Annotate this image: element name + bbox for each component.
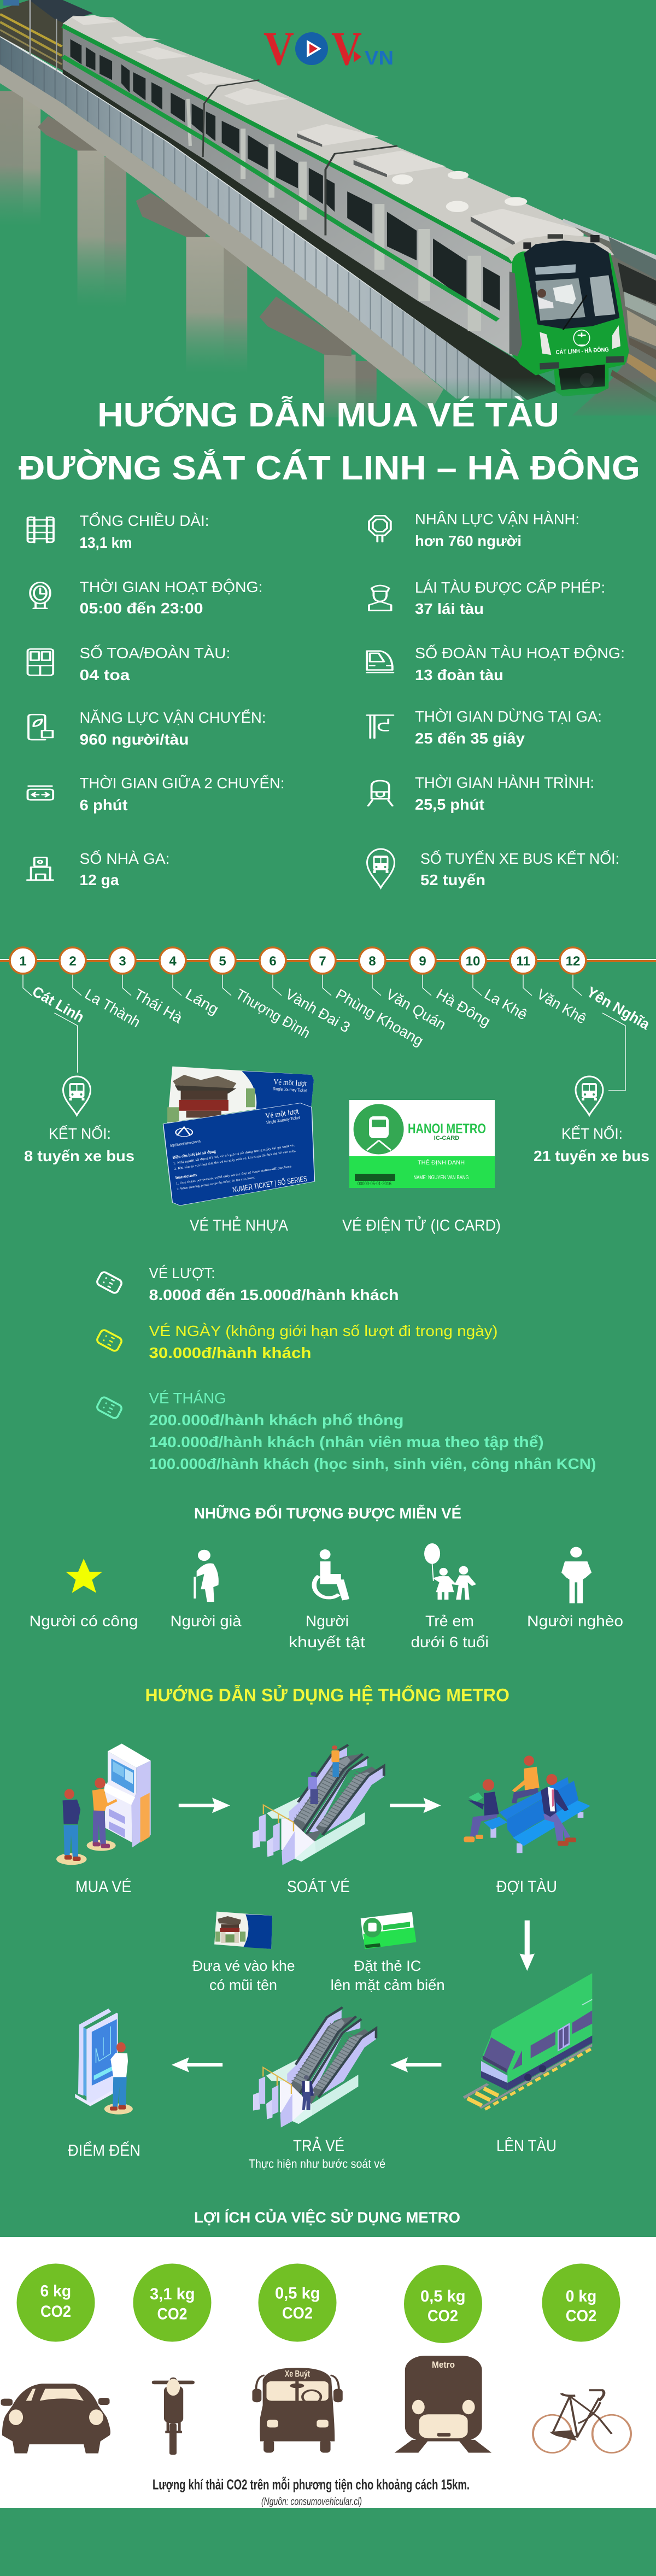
stat: total length: [80, 512, 209, 551]
fare: day pass: 30.000đ/hành khách: [149, 1344, 312, 1361]
CO2 badge: car: 6 kg: [40, 2282, 71, 2300]
ticket labels: VÉ ĐIỆN TỬ (IC CARD): [342, 1216, 501, 1234]
plastic ticket cards: 1. One ticket per person, valid only on the day of issue station-off purchase.: [175, 1164, 292, 1186]
gate instruction text: Đưa vé vào khe: [192, 1958, 295, 1974]
icon: station: [27, 857, 53, 880]
label: bus: Xe Buýt: [285, 2368, 310, 2379]
fare: single journey: VÉ LƯỢT:: [149, 1264, 215, 1281]
panel: key facts: [27, 511, 625, 888]
line map: 12 stations: Phùng Khoang: [333, 986, 426, 1049]
icon: stop sign: [369, 516, 391, 542]
arrow: to ticket gate: [179, 1798, 230, 1813]
icon: track: [28, 517, 54, 542]
stat: staff: hơn 760 người: [415, 532, 522, 549]
callout: Cát Linh connections: 8 tuyến xe bus: [24, 1148, 134, 1164]
icon: children with balloon: [424, 1543, 476, 1600]
icon: man: [561, 1547, 591, 1603]
stat: staff: [415, 511, 579, 549]
stat: stations: SỐ NHÀ GA:: [80, 850, 169, 867]
step labels: row 2: Thực hiện như bước soát vé: [249, 2157, 385, 2170]
IC card: 00000-05-01-2016: [358, 1181, 391, 1186]
icon: Cát Linh bus pin: [63, 1076, 91, 1115]
stat: stations: 12 ga: [80, 871, 119, 888]
heading: exempt groups: NHỮNG ĐỐI TƯỢNG ĐƯỢC MIỄN VÉ: [194, 1504, 461, 1522]
plastic ticket cards: 1. Mỗi người sử dụng 01 vé, vé có giá trị sử dụng trong ngày tại ga xuất vé.: [173, 1143, 295, 1166]
icon: phone ticket: [28, 715, 52, 740]
label: elderly: Người già: [171, 1613, 242, 1629]
stat: dwell time: 25 đến 35 giây: [415, 730, 525, 747]
CO2 badge: bus: CO2: [282, 2304, 313, 2322]
line map: 12 stations: Vành Đai 3: [283, 986, 353, 1036]
label: the poor: Người nghèo: [527, 1613, 623, 1629]
label: disabled: Người: [306, 1613, 349, 1629]
title: ĐƯỜNG SẮT CÁT LINH – HÀ ĐÔNG: [19, 449, 640, 487]
icon: bus pin: [367, 849, 395, 888]
stat: licensed drivers: [415, 579, 605, 617]
icon: ticket mint: [96, 1396, 123, 1419]
callout: Yên Nghĩa connections: 21 tuyến xe bus: [534, 1148, 649, 1164]
line map: 12 stations: 7: [319, 954, 326, 969]
panel: CO2 emissions: [0, 2237, 656, 2508]
stat: connected bus routes: [420, 850, 619, 888]
step labels: row 2: [68, 2136, 557, 2170]
label: metro: Metro: [432, 2360, 455, 2370]
step labels: row 2: LÊN TÀU: [496, 2137, 557, 2155]
CO2 badge: bicycle: [542, 2263, 620, 2342]
fare: single journey: 8.000đ đến 15.000đ/hành khách: [149, 1286, 399, 1303]
logo: VOV.VN: VN: [365, 46, 394, 69]
fare: monthly pass: 200.000đ/hành khách phổ thông: [149, 1412, 403, 1428]
CO2 badge: bus: [258, 2263, 337, 2342]
stat: cars per train: [80, 644, 231, 683]
arrow: down to boarding: [520, 1921, 535, 1971]
hero photo: elevated metro train on viaduct: [0, 0, 656, 424]
stat: capacity: 960 người/tàu: [80, 731, 189, 748]
gate instruction text: [192, 1958, 445, 1993]
line map: 12 stations: Cát Linh: [30, 983, 87, 1026]
stat: dwell time: THỜI GIAN DỪNG TẠI GA:: [415, 708, 602, 725]
line map: 12 stations: Văn Quán: [383, 986, 449, 1033]
icon: train front: [368, 781, 393, 806]
label: meritorious people: Người có công: [30, 1613, 138, 1629]
plastic ticket cards: Điều cần biết khi sử dụng: [172, 1149, 216, 1160]
CO2 badge: car: [16, 2263, 95, 2342]
stat: stations: [80, 850, 169, 888]
hero photo: elevated metro train on viaduct: CÁT LINH - HÀ ĐÔNG: [555, 346, 609, 356]
stat: connected bus routes: 52 tuyến: [420, 871, 485, 888]
icon: ticket white: [96, 1271, 123, 1294]
stat: total length: TỔNG CHIỀU DÀI:: [80, 512, 209, 529]
line map: 12 stations: [0, 947, 656, 1091]
icon: bus: [252, 2368, 343, 2453]
step labels: row 1: ĐỢI TÀU: [496, 1878, 557, 1896]
fare: single journey: [149, 1264, 399, 1303]
line map: 12 stations: La Khê: [482, 986, 530, 1023]
step: boarding train illustration: [463, 1973, 592, 2109]
icon: carriage: [28, 649, 53, 675]
icon: star: [66, 1559, 102, 1593]
stat: licensed drivers: LÁI TÀU ĐƯỢC CẤP PHÉP:: [415, 579, 605, 596]
stat: connected bus routes: SỐ TUYẾN XE BUS KẾT NỐI:: [420, 850, 619, 867]
CO2 badge: motorbike: [133, 2263, 211, 2342]
icon: clock: [30, 582, 50, 608]
CO2 badge: motorbike: 3,1 kg: [150, 2285, 195, 2303]
fare: monthly pass: VÉ THÁNG: [149, 1390, 226, 1407]
icon: bicycle: [533, 2390, 631, 2453]
step: return ticket illustration: [253, 2007, 376, 2128]
label: disabled: khuyết tật: [289, 1634, 365, 1650]
logo: VOV.VN: V: [331, 22, 362, 75]
icon: train side: [367, 651, 393, 672]
arrow: to return ticket: [390, 2057, 441, 2072]
plastic ticket cards: http://hanoimetro.com.vn: [170, 1140, 201, 1148]
plastic ticket cards: [163, 1067, 315, 1205]
icon: elderly person: [194, 1550, 219, 1602]
line map: 12 stations: 10: [466, 954, 480, 969]
stat: headway: [80, 775, 284, 813]
icon: driver: [369, 586, 391, 611]
stat: journey time: THỜI GIAN HÀNH TRÌNH:: [415, 774, 594, 791]
line map: 12 stations: 9: [419, 954, 426, 969]
stat: capacity: NĂNG LỰC VẬN CHUYỂN:: [80, 709, 266, 726]
icon: car: [1, 2384, 110, 2454]
gate instruction text: có mũi tên: [209, 1977, 277, 1993]
plastic ticket cards: Single Journey Ticket: [273, 1086, 307, 1093]
plastic ticket cards: Instructions: [175, 1172, 197, 1180]
step: destination map kiosk illustration: [75, 2009, 133, 2115]
IC card: [349, 1100, 495, 1188]
icon: Yên Nghĩa bus pin: [576, 1076, 603, 1115]
callout: Cát Linh connections: [24, 1125, 134, 1164]
line map: 12 stations: 3: [119, 954, 126, 969]
stat: cars per train: 04 toa: [80, 666, 130, 683]
callout: Yên Nghĩa connections: [534, 1125, 649, 1164]
step labels: row 1: [75, 1878, 557, 1896]
icon: metro: [395, 2356, 491, 2453]
plastic ticket cards: Single Journey Ticket: [266, 1115, 301, 1125]
line map: 12 stations: La Thành: [82, 986, 143, 1031]
line map: 12 stations: Láng: [183, 986, 221, 1018]
callout: Yên Nghĩa connections: KẾT NỐI:: [561, 1125, 623, 1142]
caption: Lượng khí thải CO2 trên mỗi phương tiện cho khoảng cách 15km.: [153, 2477, 470, 2493]
CO2 badge: car: CO2: [40, 2303, 71, 2321]
stat: operating hours: 05:00 đến 23:00: [80, 600, 203, 617]
icon: platform sign: [367, 715, 393, 738]
plastic ticket cards: Vé một lượt: [273, 1078, 307, 1088]
ticket labels: [190, 1216, 501, 1234]
stat: licensed drivers: 37 lái tàu: [415, 600, 484, 617]
step labels: row 1: SOÁT VÉ: [287, 1878, 350, 1896]
label: disabled: [289, 1613, 365, 1650]
icon: motorbike: [152, 2378, 195, 2455]
step labels: row 1: MUA VÉ: [75, 1878, 131, 1896]
plastic ticket cards: Vé một lượt: [265, 1108, 300, 1121]
line map: 12 stations: 2: [69, 954, 77, 969]
icon: interval board: [28, 786, 53, 800]
step: buy ticket illustration: [56, 1743, 151, 1865]
line map: 12 stations: Yên Nghĩa: [584, 983, 653, 1033]
label: children under six: Trẻ em: [425, 1613, 474, 1629]
line map: 12 stations: 12: [566, 954, 580, 969]
stat: trains in service: SỐ ĐOÀN TÀU HOẠT ĐỘNG:: [415, 644, 625, 661]
heading: benefits: LỢI ÍCH CỦA VIỆC SỬ DỤNG METRO: [194, 2209, 460, 2226]
plastic ticket cards: NUMER TICKET | SỐ SERIES: [232, 1174, 308, 1194]
gate instruction text: Đặt thẻ IC: [354, 1958, 421, 1974]
label: children under six: dưới 6 tuổi: [411, 1634, 489, 1650]
stat: staff: NHÂN LỰC VẬN HÀNH:: [415, 511, 579, 528]
fare: monthly pass: 140.000đ/hành khách (nhân viên mua theo tập thể): [149, 1433, 543, 1450]
CO2 badge: metro: 0,5 kg: [420, 2287, 466, 2305]
logo: VOV.VN: V: [263, 22, 294, 75]
fare: day pass: VÉ NGÀY (không giới hạn số lượt đi trong ngày): [149, 1322, 497, 1339]
step: ticket gate illustration: [253, 1745, 384, 1865]
step labels: row 2: ĐIỂM ĐẾN: [68, 2141, 140, 2159]
stat: cars per train: SỐ TOA/ĐOÀN TÀU:: [80, 644, 231, 661]
gate instruction text: lên mặt cảm biến: [331, 1977, 445, 1993]
plastic ticket cards: 2. Khi vào ga vui lòng đưa thẻ vé tại máy soát vé, khi ra ga thì đưa thẻ vé vào máy.: [174, 1149, 296, 1171]
callout: Cát Linh connections: KẾT NỐI:: [49, 1125, 111, 1142]
line map: 12 stations: 8: [368, 954, 376, 969]
fare: day pass: [149, 1322, 497, 1361]
CO2 badge: bicycle: CO2: [566, 2307, 596, 2325]
CO2 badge: bicycle: 0 kg: [566, 2287, 596, 2305]
stat: operating hours: [80, 578, 263, 617]
stat: trains in service: 13 đoàn tàu: [415, 666, 503, 683]
stat: capacity: [80, 709, 266, 748]
IC card: NAME: NGUYEN VAN BANG: [413, 1175, 469, 1181]
small plastic ticket: [214, 1912, 272, 1949]
arrow: to destination: [172, 2057, 222, 2072]
icon: ticket yellow: [96, 1329, 123, 1352]
panel: exempt groups: [30, 1543, 623, 1650]
stat: operating hours: THỜI GIAN HOẠT ĐỘNG:: [80, 578, 263, 595]
CO2 badge: metro: [404, 2265, 482, 2343]
CO2 badge: bus: 0,5 kg: [275, 2285, 320, 2303]
line map: 12 stations: Thượng Đình: [233, 986, 313, 1041]
heading: how to use metro: HƯỚNG DẪN SỬ DỤNG HỆ THỐNG METRO: [145, 1684, 509, 1705]
ticket labels: VÉ THẺ NHỰA: [190, 1216, 289, 1234]
label: children under six: [411, 1613, 489, 1650]
stat: dwell time: [415, 708, 602, 747]
line map: 12 stations: Thái Hà: [131, 986, 186, 1027]
stat: journey time: 25,5 phút: [415, 796, 484, 813]
title: [19, 396, 640, 487]
stat: total length: 13,1 km: [80, 534, 132, 551]
stat: headway: 6 phút: [80, 797, 128, 813]
plastic ticket cards: 2. When entering, please swipe the ticket. At the exit, insert.: [177, 1176, 256, 1191]
line map: 12 stations: 6: [269, 954, 277, 969]
line map: 12 stations: 1: [19, 954, 27, 969]
small IC card: [361, 1912, 416, 1949]
step: waiting bench illustration: [464, 1755, 590, 1853]
IC card: IC-CARD: [434, 1135, 459, 1141]
line map: 12 stations: Hà Đông: [434, 986, 493, 1030]
IC card: HANOI METRO: [408, 1121, 486, 1137]
step labels: row 2: TRẢ VÉ: [293, 2136, 344, 2155]
stat: journey time: [415, 774, 594, 813]
arrow: to waiting: [390, 1798, 441, 1813]
line map: 12 stations: 5: [219, 954, 226, 969]
fare: monthly pass: 100.000đ/hành khách (học sinh, sinh viên, công nhân KCN): [149, 1455, 596, 1472]
icon: wheelchair: [314, 1549, 349, 1601]
CO2 badge: metro: CO2: [427, 2307, 458, 2325]
line map: 12 stations: Văn Khê: [534, 986, 589, 1027]
source note: (Nguồn: consumovehicular.cl): [261, 2496, 362, 2508]
stat: headway: THỜI GIAN GIỮA 2 CHUYẾN:: [80, 775, 284, 792]
title: HƯỚNG DẪN MUA VÉ TÀU: [97, 396, 559, 434]
stat: trains in service: [415, 644, 625, 683]
logo: VOV.VN: [263, 22, 394, 75]
CO2 badge: motorbike: CO2: [157, 2305, 187, 2323]
fare: monthly pass: [149, 1390, 596, 1472]
line map: 12 stations: 11: [516, 954, 530, 969]
IC card: THẺ ĐỊNH DANH: [418, 1159, 465, 1166]
line map: 12 stations: 4: [169, 954, 177, 969]
